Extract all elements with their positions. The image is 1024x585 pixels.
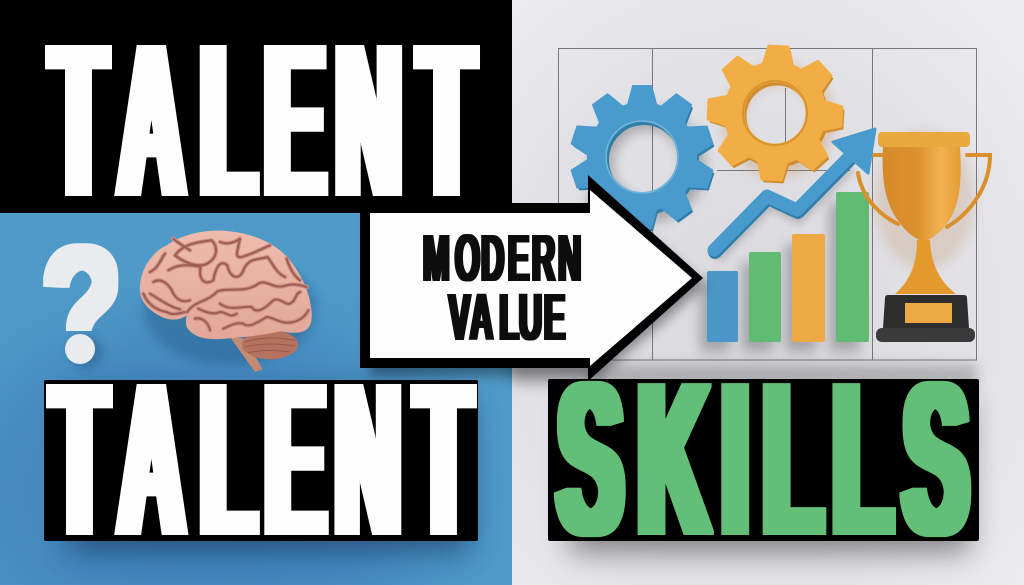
bar: green small	[749, 252, 781, 342]
cortex folds soft shade	[143, 239, 308, 330]
icon: brain	[140, 231, 317, 372]
brain stem	[230, 337, 263, 372]
heading: top talent: TALENT	[51, 0, 474, 243]
arrow label: MODERN	[423, 221, 581, 296]
background: lower-left blue panel	[0, 213, 512, 585]
heading box shadow: lower talent	[70, 395, 470, 551]
arrow label: VALUE	[449, 280, 565, 355]
background: right grey panel	[512, 0, 1024, 585]
icon: orange gear	[705, 43, 847, 186]
trophy bowl	[883, 147, 961, 241]
bar: blue	[707, 271, 738, 342]
cerebrum	[140, 231, 312, 339]
shadow band above skills	[512, 364, 977, 386]
bar: orange	[792, 234, 825, 342]
icon: rising trend arrow	[714, 129, 875, 258]
trophy stem	[895, 240, 956, 294]
arrow shadow	[370, 190, 705, 385]
heading: skills: SKILLS	[558, 340, 968, 579]
heading: lower talent: TALENT	[52, 336, 471, 582]
icon: trophy	[858, 130, 990, 342]
trophy plate	[905, 303, 952, 323]
arrow label	[423, 221, 581, 355]
icon: blue gear	[570, 86, 716, 231]
arrow callout	[360, 175, 703, 381]
trophy handles	[858, 155, 990, 227]
trophy rim	[878, 132, 970, 147]
chart grid	[558, 48, 976, 360]
bar chart	[700, 192, 869, 352]
cerebellum	[242, 330, 298, 359]
bar: green tall	[836, 192, 869, 342]
cortex folds	[143, 239, 308, 330]
background: upper-left black panel	[0, 0, 512, 213]
icon: question mark: ?	[41, 213, 122, 403]
icon: question mark	[43, 243, 118, 370]
heading box shadow: skills	[570, 400, 970, 552]
heading box: lower talent	[44, 380, 478, 541]
trophy base	[883, 295, 969, 328]
heading box: skills	[548, 379, 979, 541]
